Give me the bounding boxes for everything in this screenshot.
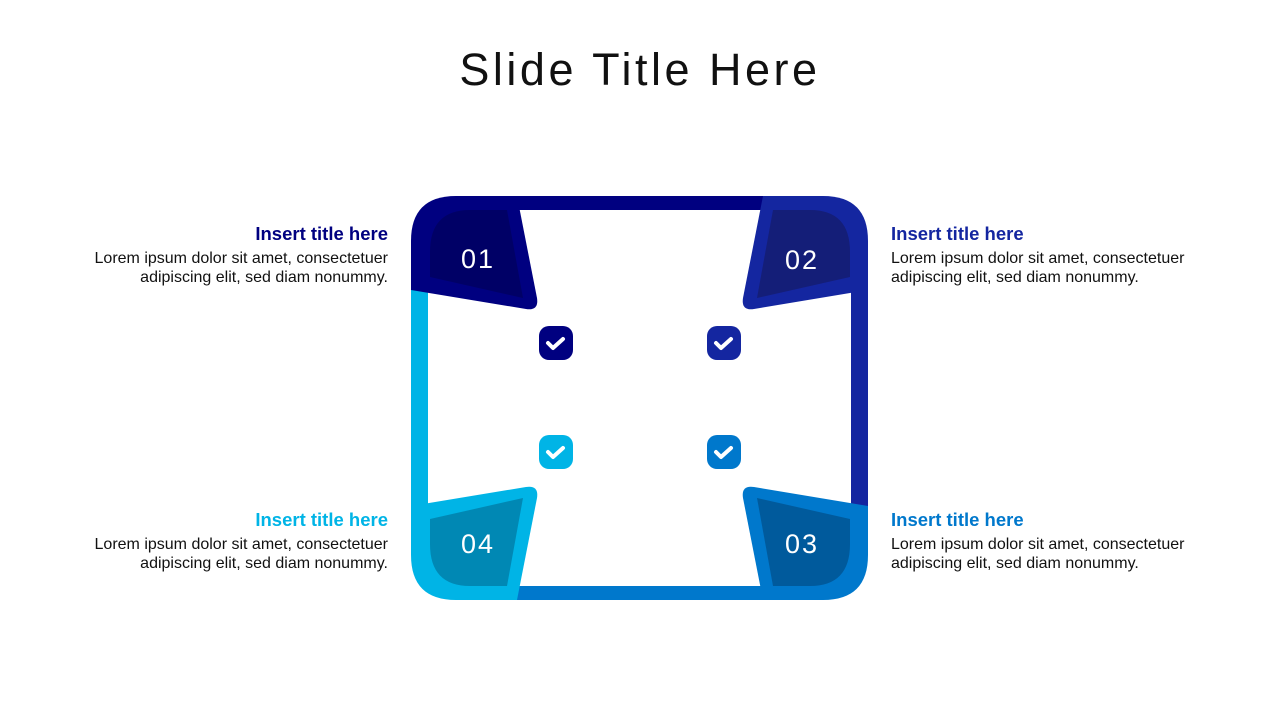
text block 04: Lorem ipsum dolor sit amet, consectetuer [95,536,388,553]
text block 02 [891,223,1184,286]
corner 04: 04 [461,529,495,559]
text block 01: Lorem ipsum dolor sit amet, consectetuer [95,250,388,267]
text block 03: Insert title here [891,509,1024,530]
corner 03 [743,487,868,600]
title: Slide Title Here [459,44,821,95]
text block 03: adipiscing elit, sed diam nonummy. [891,555,1139,572]
corner 01: 01 [461,244,495,274]
text block 03 [891,509,1184,572]
text block 02: Insert title here [891,223,1024,244]
corner 02 [743,196,868,309]
frame bars [411,196,868,600]
text block 04 [95,509,388,572]
corner 03: 03 [785,529,819,559]
corner 04 [411,487,537,600]
text block 01: adipiscing elit, sed diam nonummy. [140,269,388,286]
icon: check 2 [707,326,741,360]
text block 03: Lorem ipsum dolor sit amet, consectetuer [891,536,1184,553]
text block 01: Insert title here [255,223,388,244]
text block 04: adipiscing elit, sed diam nonummy. [140,555,388,572]
corner 02: 02 [785,245,819,275]
text block 04: Insert title here [255,509,388,530]
icon: check 4 [539,435,573,469]
text block 01 [95,223,388,286]
text block 02: Lorem ipsum dolor sit amet, consectetuer [891,250,1184,267]
icon: check 1 [539,326,573,360]
corner 01 [411,196,537,309]
text block 02: adipiscing elit, sed diam nonummy. [891,269,1139,286]
icon: check 3 [707,435,741,469]
